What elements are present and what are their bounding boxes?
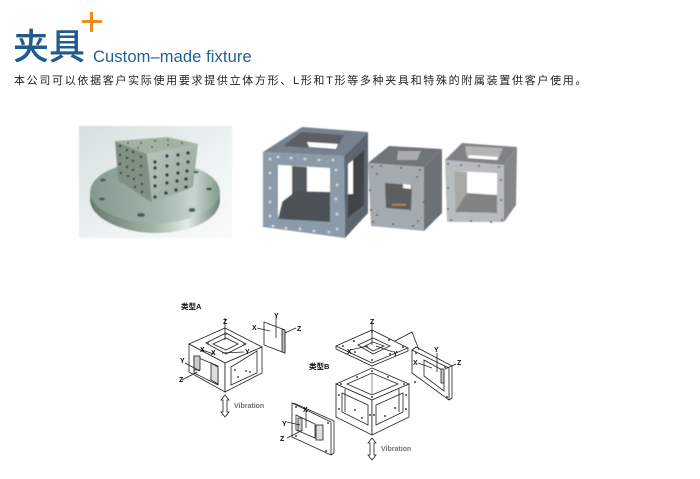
panel A with axes xyxy=(257,317,296,353)
arrow: vibration A xyxy=(221,395,229,417)
label: type A: 类型A xyxy=(181,301,202,311)
label: vibration B: Vibration xyxy=(381,446,411,453)
axis labels A: X xyxy=(200,347,205,354)
axis labels B: Y xyxy=(434,347,439,354)
axis labels A xyxy=(179,313,302,384)
axis labels B: X xyxy=(303,407,308,414)
subtitle: English heading: Custom–made fixture xyxy=(93,48,252,66)
big frame xyxy=(263,127,368,238)
axis labels B: X xyxy=(413,360,418,367)
axis labels B: Z xyxy=(370,319,375,326)
top plate B xyxy=(336,322,408,366)
axis labels B: Y xyxy=(282,421,287,428)
cube left face xyxy=(115,141,152,203)
diagram: type B xyxy=(280,319,462,460)
icon: orange plus xyxy=(82,12,102,32)
axis labels A: Z xyxy=(297,326,302,333)
small frame xyxy=(445,143,517,223)
arrow: vibration B xyxy=(368,438,376,460)
axis labels B xyxy=(280,319,462,443)
axis labels A: Z xyxy=(223,319,228,326)
title: Chinese heading: 夹具 xyxy=(13,26,85,67)
description text: 本公司可以依据客户实际使用要求提供立体方形、L形和T形等多种夹具和特殊的附属装置供客户使用。 xyxy=(14,75,588,87)
right panel B xyxy=(412,347,456,400)
axis labels B: Z xyxy=(457,360,462,367)
axis labels B: X xyxy=(347,349,352,356)
frame cube B xyxy=(336,368,409,435)
cube right face xyxy=(147,144,198,203)
axis labels A: X xyxy=(252,325,257,332)
flange top xyxy=(90,161,220,223)
left panel B xyxy=(287,403,334,455)
cube A xyxy=(182,318,262,392)
photo: three hollow cube frames xyxy=(263,127,517,238)
photo: cube on round flange xyxy=(79,126,232,238)
label: type B: 类型B xyxy=(309,361,330,371)
axis labels A: Y xyxy=(245,349,250,356)
flange holes xyxy=(99,171,212,217)
axis labels A: Y xyxy=(274,313,279,320)
cube top face xyxy=(115,137,198,154)
axis labels A: Y xyxy=(180,358,185,365)
middle frame xyxy=(368,146,442,231)
diagram: type A xyxy=(179,301,302,417)
leader line xyxy=(395,332,419,350)
axis labels A: Z xyxy=(179,377,184,384)
axis labels B: Z xyxy=(280,436,285,443)
cube holes xyxy=(119,139,190,199)
flange rim xyxy=(90,192,220,233)
axis labels B: Y xyxy=(393,351,398,358)
axis labels A: X xyxy=(211,350,216,357)
label: vibration A: Vibration xyxy=(234,403,264,410)
